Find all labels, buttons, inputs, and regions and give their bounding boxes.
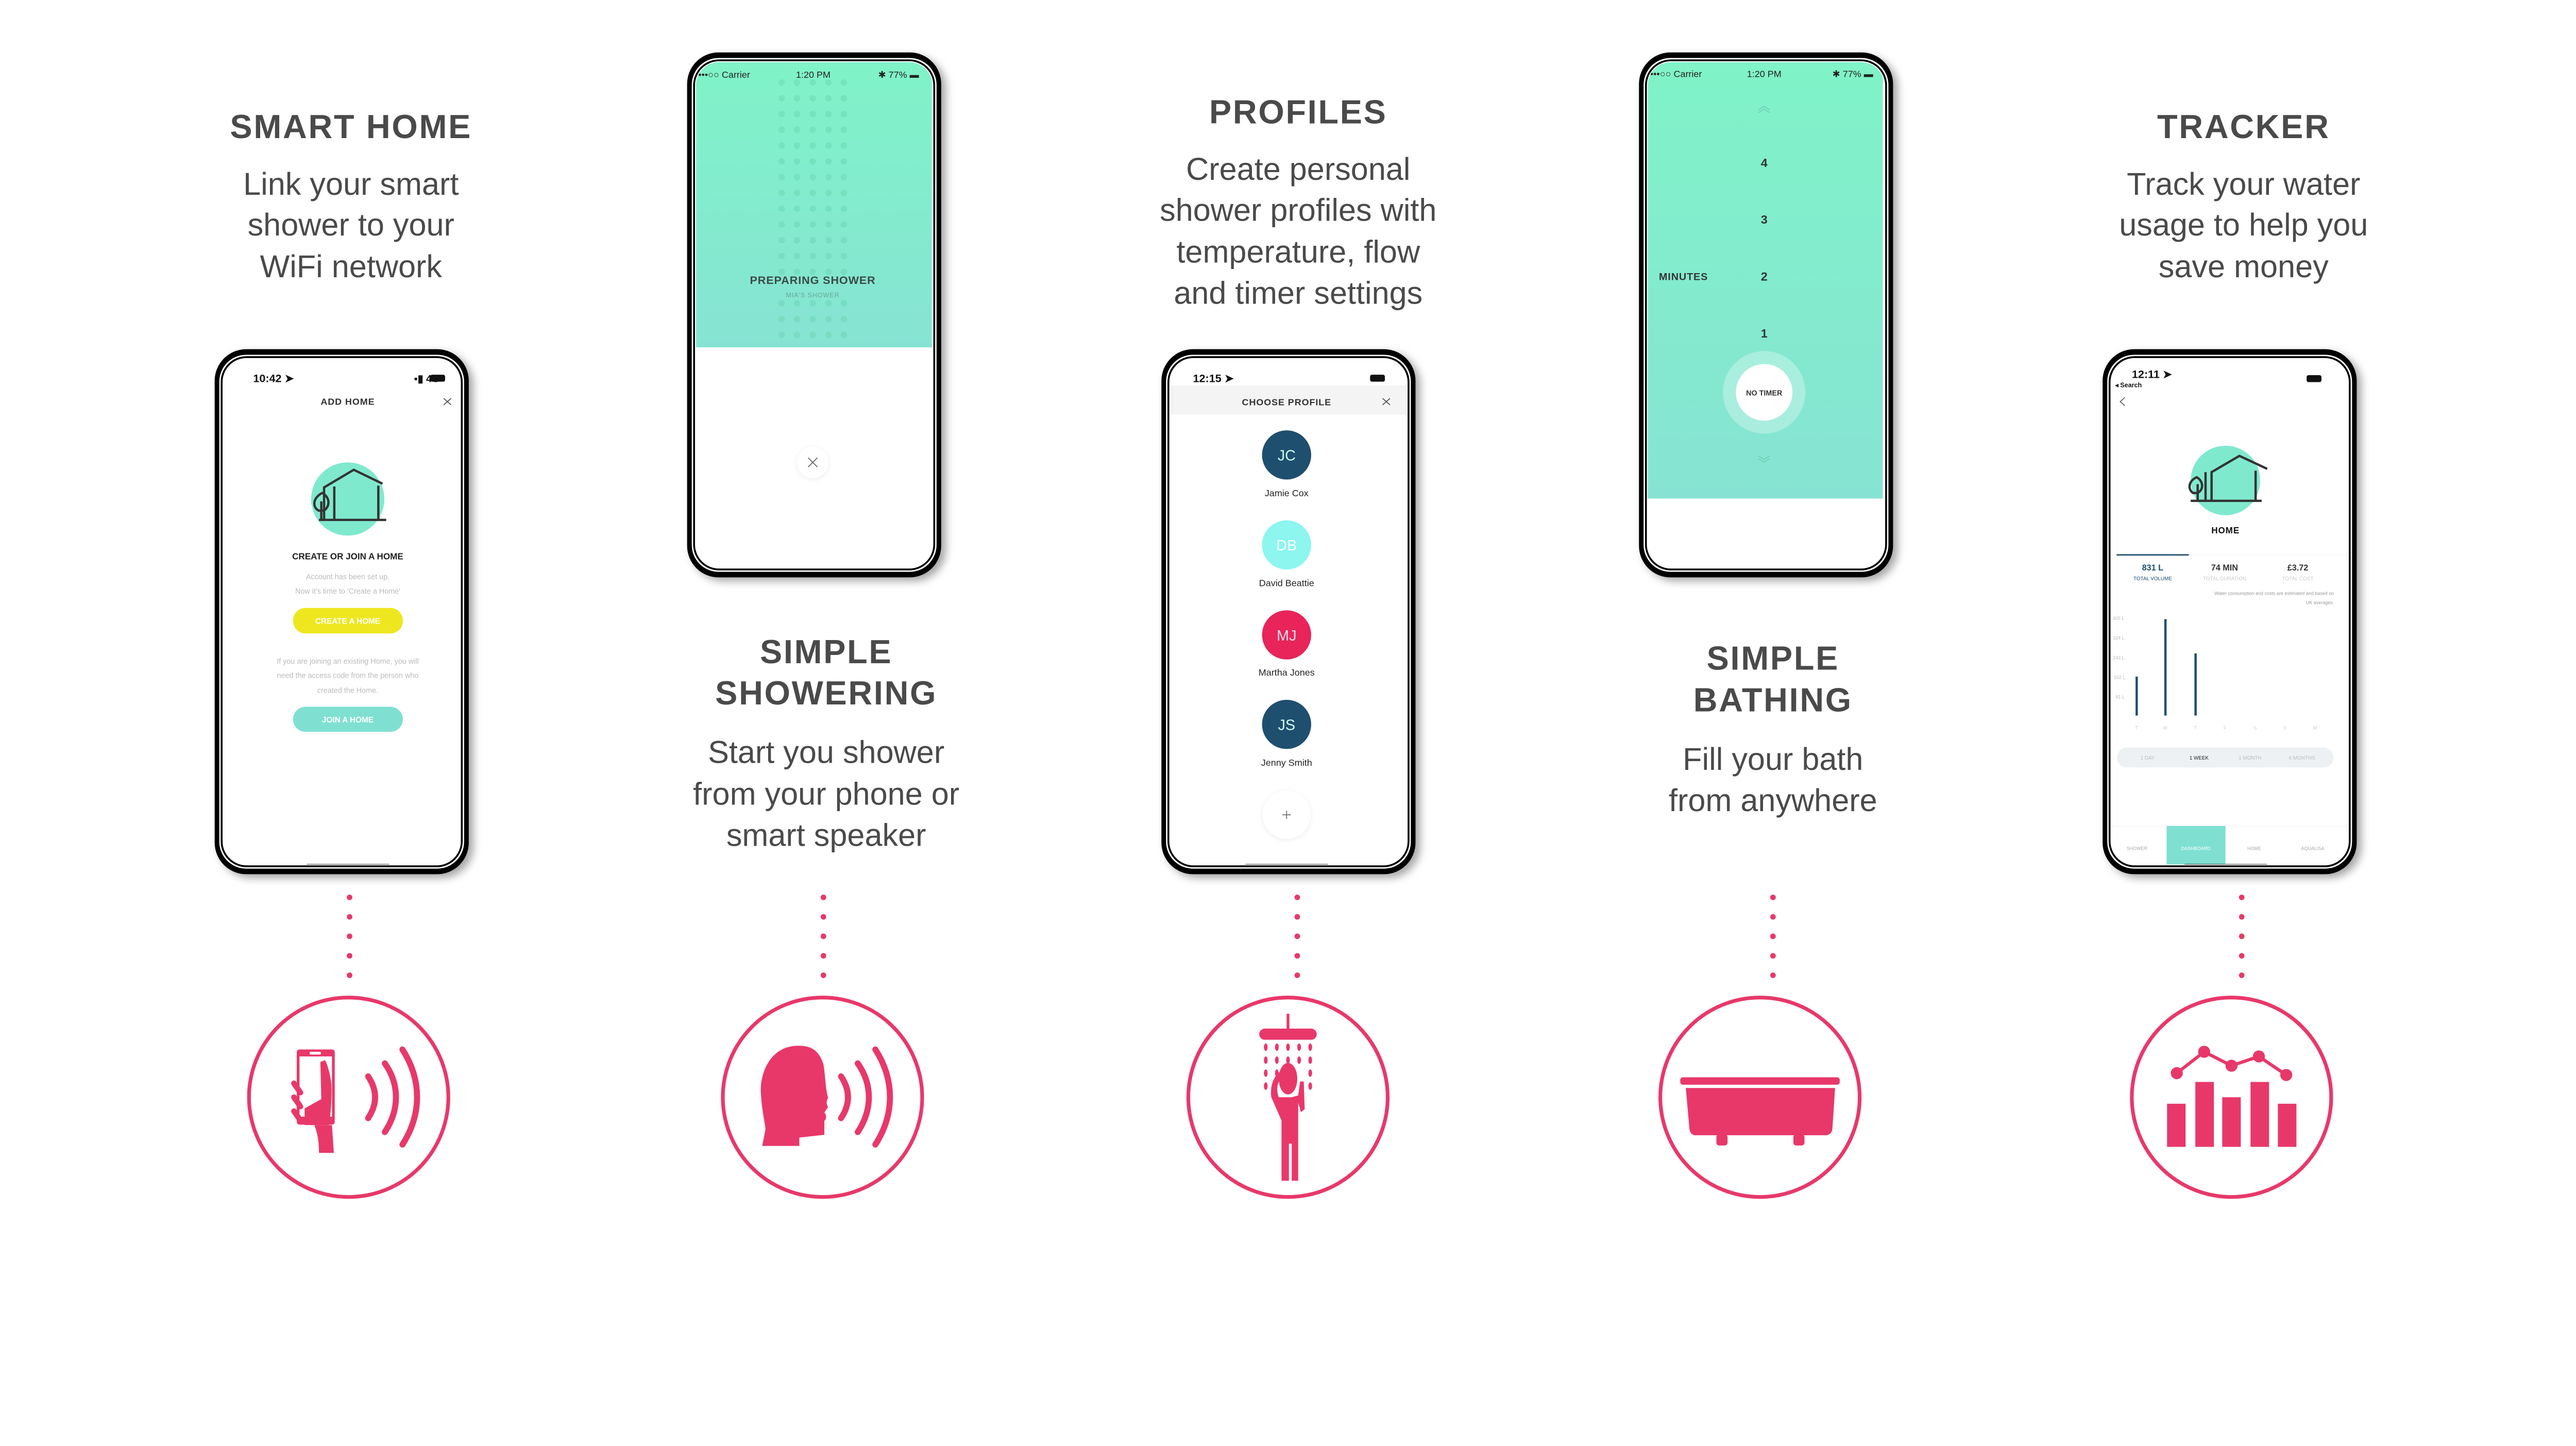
phone: choose profile screen: JS bbox=[1278, 717, 1295, 733]
phone: choose profile screen: Jamie Cox bbox=[1265, 488, 1309, 498]
phone: choose profile screen: Jenny Smith bbox=[1261, 758, 1312, 768]
phone: add home screen: 10:42 ➤ bbox=[253, 372, 295, 385]
text: simple showering: SIMPLE bbox=[760, 633, 892, 670]
text: profiles: temperature, flow bbox=[1176, 234, 1420, 269]
phone: tracker dashboard screen: S bbox=[2253, 726, 2257, 731]
text: tracker: Track your water bbox=[2127, 166, 2360, 201]
icon: bathtub bbox=[1660, 998, 1860, 1197]
connector dots: column 3 bbox=[1295, 895, 1300, 978]
phone: add home screen: CREATE OR JOIN A HOME bbox=[292, 551, 403, 561]
phone: tracker dashboard screen: 74 MIN bbox=[2211, 563, 2238, 573]
phone: tracker dashboard screen: 1 MONTH bbox=[2239, 755, 2262, 761]
text: profiles: and timer settings bbox=[1174, 275, 1422, 310]
phone: choose profile screen: Martha Jones bbox=[1259, 667, 1315, 678]
phone: choose profile screen: 12:15 ➤ bbox=[1193, 372, 1234, 385]
phone: add home screen: Now it's time to 'Create a Home' bbox=[295, 587, 400, 596]
text: smart home: shower to your bbox=[248, 207, 454, 242]
phone: timer screen: 1 bbox=[1761, 327, 1768, 340]
phone: add home screen: created the Home. bbox=[317, 686, 378, 695]
phone: choose profile screen: CHOOSE PROFILE bbox=[1242, 397, 1331, 408]
phone: timer screen: 2 bbox=[1761, 270, 1768, 283]
phone: tracker dashboard screen: £3.72 bbox=[2287, 563, 2308, 573]
phone: tracker dashboard screen: ◂ Search bbox=[2114, 381, 2142, 389]
icon: phone in hand with signal bbox=[249, 998, 448, 1197]
phone: tracker dashboard screen: W bbox=[2163, 726, 2167, 731]
phone: tracker dashboard screen: S bbox=[2283, 726, 2286, 731]
phone: timer screen: •••○○ Carrier bbox=[1650, 69, 1702, 79]
connector dots: column 5 bbox=[2239, 895, 2245, 978]
phone: preparing shower screen: ✱ 77% ▬ bbox=[878, 70, 919, 80]
icon: person in shower bbox=[1189, 998, 1387, 1197]
phone: timer screen: ✱ 77% ▬ bbox=[1833, 69, 1873, 79]
phone: preparing shower screen bbox=[687, 53, 941, 577]
phone: add home screen: CREATE A HOME bbox=[315, 617, 380, 626]
icon: speaking head bbox=[723, 998, 922, 1197]
connector dots: column 2 bbox=[821, 895, 826, 978]
phone: tracker dashboard screen bbox=[2103, 349, 2357, 874]
phone: add home screen: If you are joining an existing Home, you will bbox=[277, 658, 419, 666]
text: smart home: Link your smart bbox=[243, 166, 459, 201]
phone: tracker dashboard screen: HOME bbox=[2211, 526, 2240, 535]
text: simple showering: Start you shower bbox=[708, 734, 944, 769]
phone: tracker dashboard screen: 831 L bbox=[2142, 563, 2163, 573]
phone: timer screen: MINUTES bbox=[1659, 272, 1708, 283]
phone: timer screen: 4 bbox=[1761, 156, 1768, 170]
icon: usage chart bbox=[2132, 998, 2331, 1197]
phone: add home screen bbox=[215, 349, 469, 874]
text: simple bathing: Fill your bath bbox=[1683, 742, 1863, 777]
phone: choose profile screen: David Beattie bbox=[1259, 578, 1314, 589]
text: profiles: shower profiles with bbox=[1160, 192, 1436, 227]
phone: tracker dashboard screen: 81 L bbox=[2115, 694, 2125, 699]
phone: preparing shower screen: MIA'S SHOWER bbox=[786, 292, 840, 299]
text: simple bathing: SIMPLE bbox=[1707, 639, 1839, 677]
text: simple bathing: from anywhere bbox=[1669, 783, 1877, 818]
phone: tracker dashboard screen: UK averages. bbox=[2306, 600, 2334, 606]
phone: choose profile screen: DB bbox=[1276, 537, 1297, 554]
phone: add home screen: ADD HOME bbox=[320, 397, 375, 407]
phone: tracker dashboard screen: M bbox=[2313, 726, 2317, 731]
phone: tracker dashboard screen: T bbox=[2194, 726, 2197, 731]
phone: tracker dashboard screen: TOTAL DURATION bbox=[2203, 576, 2246, 582]
phone: tracker dashboard screen: T bbox=[2135, 726, 2138, 731]
phone: tracker dashboard screen: 243 L bbox=[2113, 655, 2124, 661]
phone: timer screen: 3 bbox=[1761, 213, 1768, 226]
phone: choose profile screen: JC bbox=[1278, 448, 1296, 464]
phone: timer screen: NO TIMER bbox=[1746, 390, 1783, 398]
text: simple bathing bbox=[1669, 639, 1877, 818]
connector dots: column 1 bbox=[347, 895, 352, 978]
text: simple showering: SHOWERING bbox=[715, 674, 937, 712]
phone: preparing shower screen: •••○○ Carrier bbox=[698, 70, 750, 80]
phone: tracker dashboard screen: 1 WEEK bbox=[2190, 755, 2209, 761]
phone: tracker dashboard screen: Water consumption and costs are estimated and based on bbox=[2214, 591, 2334, 596]
phone: choose profile screen bbox=[1161, 349, 1415, 874]
phone: tracker dashboard screen: HOME bbox=[2247, 846, 2261, 851]
text: smart home: SMART HOME bbox=[230, 108, 472, 145]
text: profiles bbox=[1160, 93, 1436, 310]
phone: timer screen: 1:20 PM bbox=[1747, 69, 1782, 79]
phone: tracker dashboard screen: 405 L bbox=[2113, 616, 2124, 621]
text: tracker: save money bbox=[2159, 249, 2329, 284]
phone: preparing shower screen: 1:20 PM bbox=[796, 70, 831, 80]
phone: timer screen bbox=[1639, 53, 1893, 577]
text: tracker: TRACKER bbox=[2157, 108, 2330, 145]
phone: tracker dashboard screen: SHOWER bbox=[2127, 846, 2147, 851]
phone: tracker dashboard screen: 12:11 ➤ bbox=[2132, 367, 2173, 380]
text: tracker bbox=[2119, 108, 2368, 284]
text: simple showering: smart speaker bbox=[726, 817, 926, 852]
phone: add home screen: Account has been set up. bbox=[306, 573, 389, 581]
text: profiles: Create personal bbox=[1186, 152, 1410, 187]
phone: tracker dashboard screen: TOTAL COST bbox=[2282, 576, 2313, 582]
phone: choose profile screen: MJ bbox=[1277, 628, 1296, 644]
phone: tracker dashboard screen: 6 MONTHS bbox=[2289, 755, 2315, 761]
phone: tracker dashboard screen: 1 DAY bbox=[2141, 755, 2155, 761]
phone: tracker dashboard screen: 324 L bbox=[2113, 635, 2124, 641]
phone: add home screen: need the access code from the person who bbox=[277, 672, 418, 680]
text: simple showering: from your phone or bbox=[693, 776, 959, 811]
text: tracker: usage to help you bbox=[2119, 207, 2368, 242]
phone: tracker dashboard screen: F bbox=[2224, 726, 2227, 731]
phone: add home screen: JOIN A HOME bbox=[322, 716, 374, 725]
phone: tracker dashboard screen: TOTAL VOLUME bbox=[2133, 576, 2172, 582]
text: simple showering bbox=[693, 633, 959, 852]
text: profiles: PROFILES bbox=[1209, 93, 1387, 130]
phone: tracker dashboard screen: DASHBOARD bbox=[2181, 846, 2211, 851]
phone: tracker dashboard screen: AQUALISA bbox=[2301, 846, 2324, 851]
text: simple bathing: BATHING bbox=[1693, 681, 1853, 718]
phone: add home screen: ▪▮ 4G bbox=[414, 374, 439, 385]
phone: tracker dashboard screen: 162 L bbox=[2114, 675, 2125, 680]
phone: preparing shower screen: PREPARING SHOWER bbox=[750, 274, 876, 287]
text: smart home: WiFi network bbox=[260, 249, 442, 284]
text: smart home bbox=[230, 108, 472, 284]
connector dots: column 4 bbox=[1770, 895, 1776, 978]
